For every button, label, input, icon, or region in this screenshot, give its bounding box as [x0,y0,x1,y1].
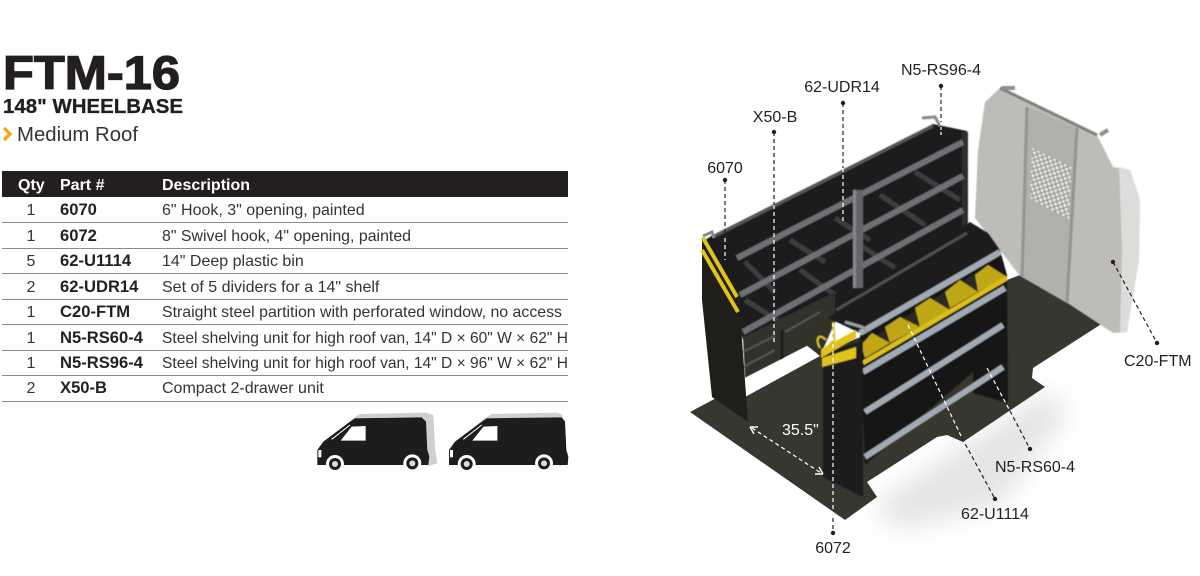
row: 62-UDR14: 62-UDR14 [60,277,139,296]
table row lines [2,222,568,402]
yellow safety stripes [702,238,738,312]
callout: 62-UDR14 [804,79,880,224]
yellow stripes [821,330,856,367]
parts table [2,171,568,402]
row: 6070: 6070 [60,200,97,219]
row: 6070: 6" Hook, 3" opening, painted [162,202,365,219]
row: X50-B: X50-B [60,378,107,397]
perforated window [1030,148,1071,220]
table header: Part # [60,177,105,194]
row: C20-FTM: Straight steel partition with perforated window, no access [162,304,562,321]
row: 62-U1114: 5 [27,253,36,270]
callout: N5-RS60-4 [987,368,1075,476]
back shelving unit [705,117,968,378]
row: N5-RS96-4 [27,353,568,372]
row: N5-RS60-4 [27,328,568,347]
dimension: 35.5 inch aisle [750,422,823,474]
callout: 6070: 6070 [707,160,743,177]
drawers: X50-B [743,292,835,378]
unit back [860,250,1008,465]
row: 6072: 6072 [60,226,97,245]
callout: 6072: 6072 [815,540,851,557]
left end panel [702,232,748,422]
row: N5-RS96-4: N5-RS96-4 [60,353,144,372]
silver rails [860,252,1005,457]
row: N5-RS60-4: N5-RS60-4 [60,328,144,347]
row: N5-RS96-4: Steel shelving unit for high roof van, 14" D × 96" W × 62" H [162,355,568,372]
row: 6072: 1 [27,228,36,245]
row: C20-FTM [27,302,562,321]
icon: van 2 [449,413,568,473]
row: N5-RS60-4: 1 [27,330,36,347]
row: 62-U1114: 14" Deep plastic bin [162,253,304,270]
callout: 62-U1114: 62-U1114 [961,506,1029,523]
white gap under drawers [745,346,820,397]
callout: C20-FTM [1111,260,1192,370]
back panel [705,124,967,345]
row: N5-RS96-4: 1 [27,355,36,372]
row: X50-B: Compact 2-drawer unit [162,380,324,397]
row: 6070 [27,200,365,219]
row: N5-RS60-4: Steel shelving unit for high roof van, 14" D × 60" W × 62" H [162,330,568,347]
callout: C20-FTM: C20-FTM [1124,353,1192,370]
row: 6072 [27,226,411,245]
row: 6070: 1 [27,202,36,219]
title: FTM-16 [3,46,180,99]
row: 62-UDR14: Set of 5 dividers for a 14" shelf [162,279,380,296]
row: X50-B [27,378,324,397]
callout: N5-RS96-4: N5-RS96-4 [901,62,981,79]
dimension: 35.5 inch aisle: 35.5" [782,422,819,439]
front shelving unit [818,222,1008,497]
van interior shelving illustration [690,88,1140,530]
yellow bins [861,265,1007,363]
callout: 6072 [815,323,851,557]
unit top [828,222,1000,333]
shelf rails [737,142,963,332]
row: 6072: 8" Swivel hook, 4" opening, painted [162,228,411,245]
callout: X50-B [753,109,797,342]
row: 62-U1114 [27,251,304,270]
table header: Qty [18,177,45,194]
floor mat [690,275,1103,520]
floor shadow [872,392,1070,530]
partition wall [975,88,1140,333]
icon: chevron [4,128,10,140]
callout: 62-UDR14: 62-UDR14 [804,79,880,96]
callout: X50-B: X50-B [753,109,797,126]
callout: 62-U1114 [908,325,1029,523]
row: C20-FTM: C20-FTM [60,302,130,321]
row: 62-UDR14 [27,277,380,296]
table header [2,171,568,197]
upright post [853,190,863,288]
callout: 6070 [707,160,743,260]
row: 62-U1114: 62-U1114 [60,251,132,270]
front end panel [823,340,863,497]
icon: van 1 [317,413,437,473]
row: 62-UDR14: 2 [27,279,36,296]
callout: N5-RS60-4: N5-RS60-4 [995,459,1075,476]
right end panel [962,132,968,232]
row: X50-B: 2 [27,380,36,397]
row: C20-FTM: 1 [27,304,36,321]
cross bars [745,172,960,322]
roof height label: Medium Roof [17,124,138,146]
callout: N5-RS96-4 [901,62,981,135]
table header: Description [162,177,250,194]
subtitle: wheelbase: 148" WHEELBASE [3,96,183,118]
